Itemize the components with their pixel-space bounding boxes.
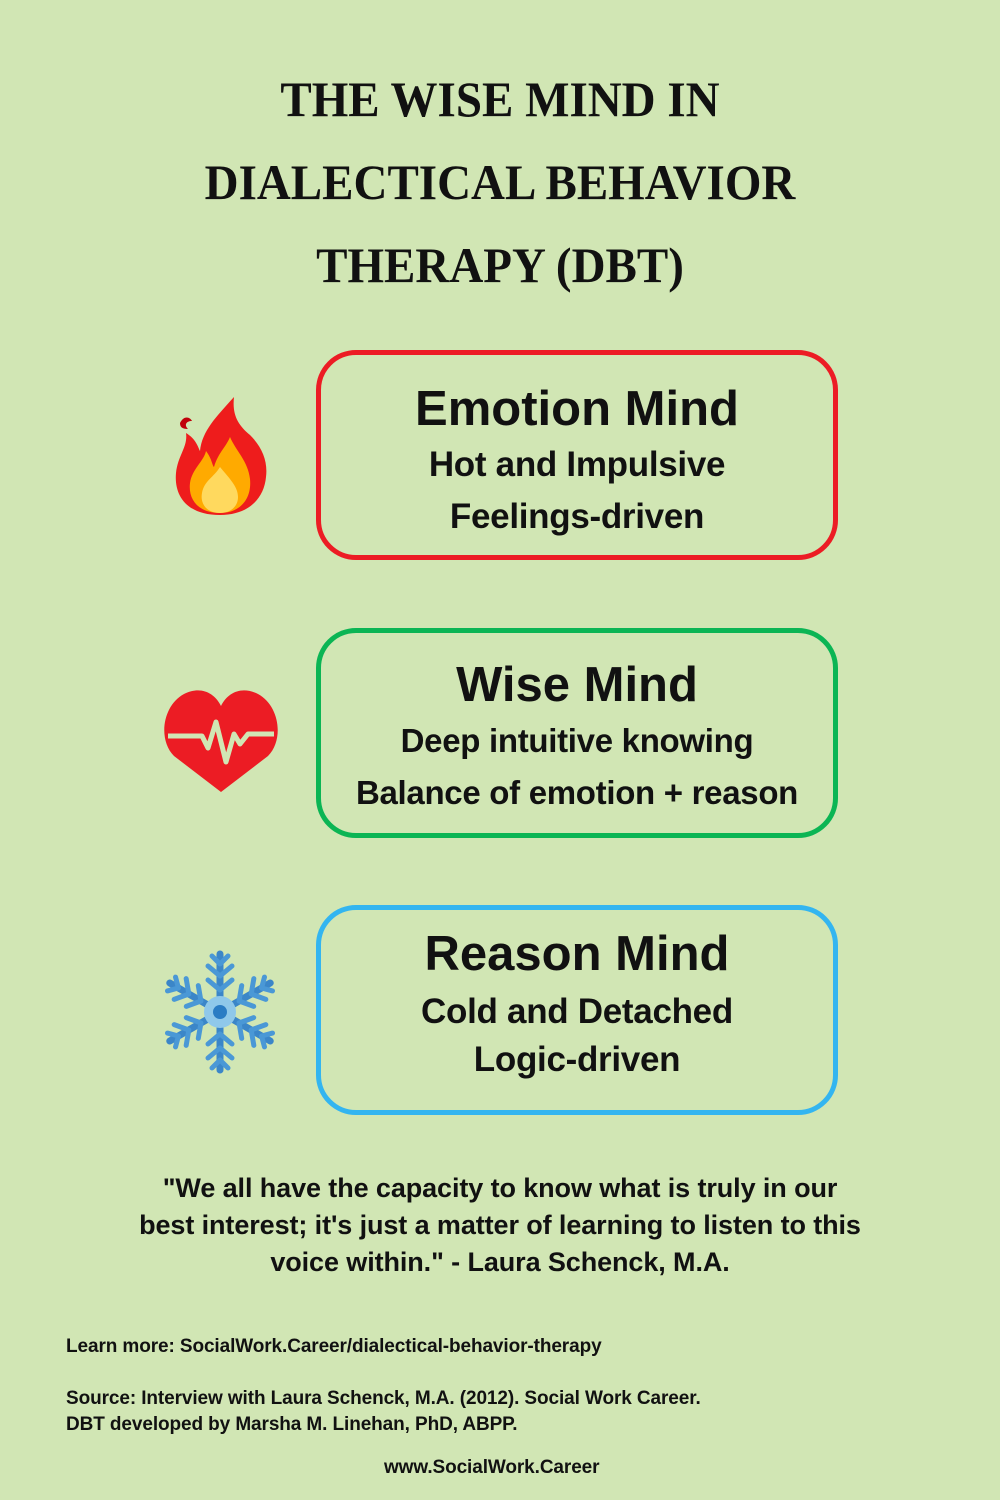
footer: source: Source: Interview with Laura Schenck, M.A. (2012). Social Work Career. <box>66 1388 701 1409</box>
icon: heart <box>164 690 278 792</box>
text: reason traits: Logic-driven <box>474 1040 680 1079</box>
quote: voice within." - Laura Schenck, M.A. <box>270 1247 730 1277</box>
heading: wise mind: Wise Mind <box>456 658 698 712</box>
text: emotion traits: Hot and Impulsive <box>429 445 725 484</box>
quote: "We all have the capacity to know what is truly in our <box>163 1173 837 1203</box>
title: THERAPY (DBT) <box>316 237 684 293</box>
title <box>205 71 796 293</box>
text: wise traits: Balance of emotion + reason <box>356 774 798 811</box>
title: DIALECTICAL BEHAVIOR <box>205 154 795 210</box>
text: emotion traits: Feelings-driven <box>450 497 704 536</box>
heading: reason mind: Reason Mind <box>425 927 729 981</box>
text: wise traits <box>356 722 798 811</box>
footer: source <box>66 1388 701 1435</box>
text: reason traits <box>421 992 733 1079</box>
panel: emotion mind <box>316 350 838 560</box>
title: THE WISE MIND IN <box>280 71 720 127</box>
footer: learn more: Learn more: SocialWork.Career/dialectical-behavior-therapy <box>66 1336 602 1357</box>
footer: website: www.SocialWork.Career <box>384 1457 599 1478</box>
heading: emotion mind: Emotion Mind <box>415 382 739 436</box>
quote: best interest; it's just a matter of learning to listen to this <box>139 1210 861 1240</box>
icon: snowflake <box>165 950 275 1074</box>
quote <box>139 1173 861 1277</box>
panel: reason mind <box>316 905 838 1115</box>
icon: fire <box>176 397 266 515</box>
footer: source: DBT developed by Marsha M. Linehan, PhD, ABPP. <box>66 1414 517 1435</box>
panel: wise mind <box>316 628 838 838</box>
text: emotion traits <box>429 445 725 536</box>
text: wise traits: Deep intuitive knowing <box>401 722 753 759</box>
text: reason traits: Cold and Detached <box>421 992 733 1031</box>
